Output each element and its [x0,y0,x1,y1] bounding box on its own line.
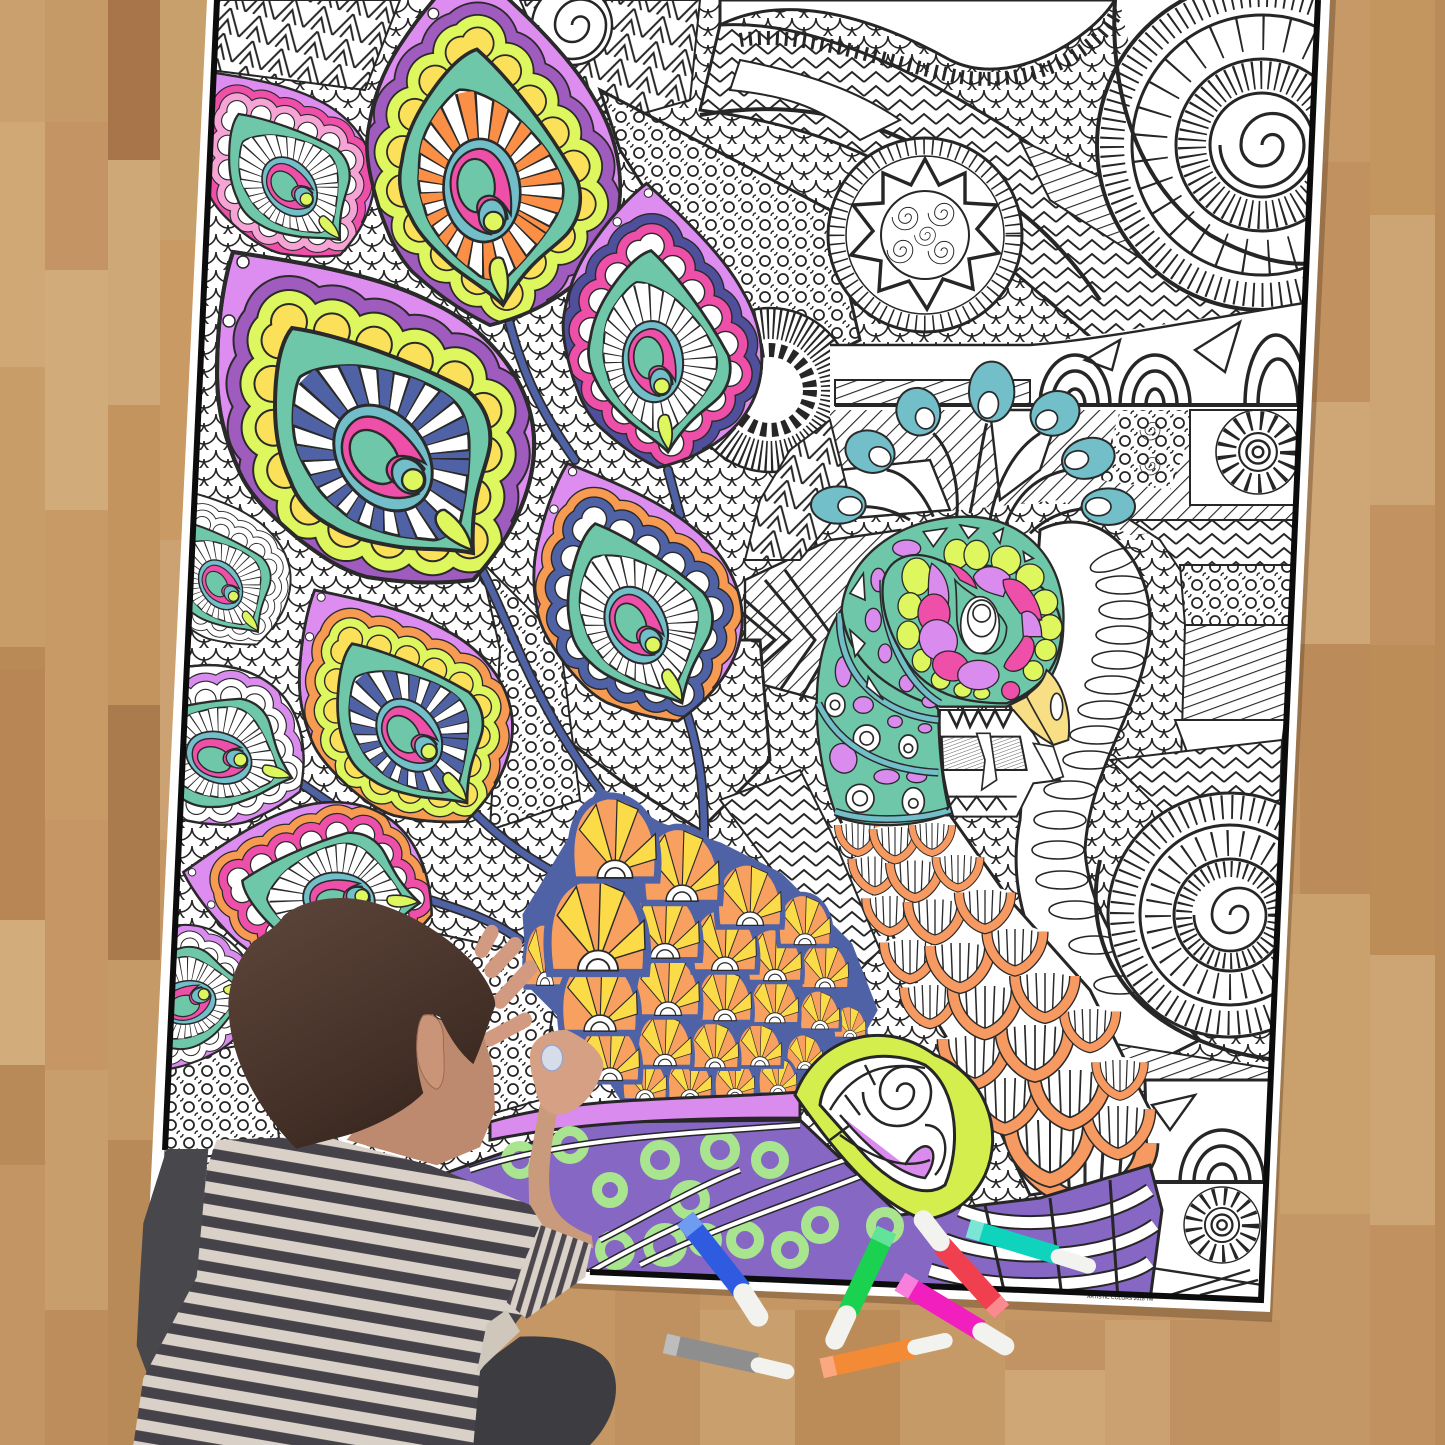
poster artwork [164,0,1314,1295]
lime swirl [795,1035,993,1220]
marker: blue [685,1218,758,1317]
copyright text: ARTISTIC COLORS 2018 TM [1087,1294,1153,1303]
grey trousers right [473,1336,616,1445]
hair [228,898,495,1149]
crest eyes [811,362,1135,525]
tail purple section [440,1092,1162,1300]
stems [288,305,704,940]
neck ornaments [825,657,932,816]
feather: left middle [192,493,292,646]
poster shadow [147,0,1336,1322]
ear [417,1015,444,1089]
feather: lower navy eye [292,589,519,825]
fist [530,1030,603,1115]
marker: teal [968,1228,1088,1266]
markers [665,1218,1088,1372]
poster black border [165,0,1318,1300]
feather: top large orange eye [365,0,622,327]
chest below beak [940,710,1063,817]
marker: orange [822,1341,945,1368]
feather: right navy [562,182,764,470]
marker: green [835,1230,887,1340]
top right spiral [1095,0,1314,312]
head paisley [882,555,1062,703]
head side ornaments [850,525,1033,708]
shirt sleeve [507,1225,592,1319]
feather: bottom orange [182,800,433,950]
marker: red [923,1220,1002,1312]
head [842,517,1064,707]
marker: grey [665,1343,787,1372]
drawing arm [528,1097,593,1248]
neck feathers [838,815,1150,1202]
boy [133,898,616,1445]
crest stems [863,423,1087,533]
bottom right corner [1145,1080,1275,1300]
feather: left bottom [172,924,244,1070]
marker in hand [541,1045,563,1071]
eye [955,580,1007,654]
rainbow arcs row [830,302,1310,410]
paisley blobs [913,563,1042,700]
feather: left lower [182,664,305,826]
shirt hem [477,1310,520,1373]
marker: magenta [900,1282,1005,1346]
far hand fingers [482,932,530,1039]
feather: top left pink [197,71,374,257]
body column with ovals [1016,522,1200,1080]
poster sheet [147,0,1330,1312]
bottom right spiral [1106,792,1280,1038]
neck and face [347,1014,495,1165]
orange fan wing [524,790,875,1100]
neck [817,607,950,825]
hatch band behind crest [830,410,1300,535]
peacock crest and head [811,362,1135,825]
half mandala [711,306,840,474]
line art background [164,0,1314,1295]
beak [1010,670,1069,745]
zigzag panels [1130,520,1300,570]
feather: big navy eye [217,252,534,583]
left side line art [160,1040,280,1160]
lime petals [897,539,1062,699]
feather: middle orange and navy [532,462,744,723]
grey trousers left [137,1149,208,1373]
mandala [828,138,1022,332]
shirt [133,1136,543,1445]
